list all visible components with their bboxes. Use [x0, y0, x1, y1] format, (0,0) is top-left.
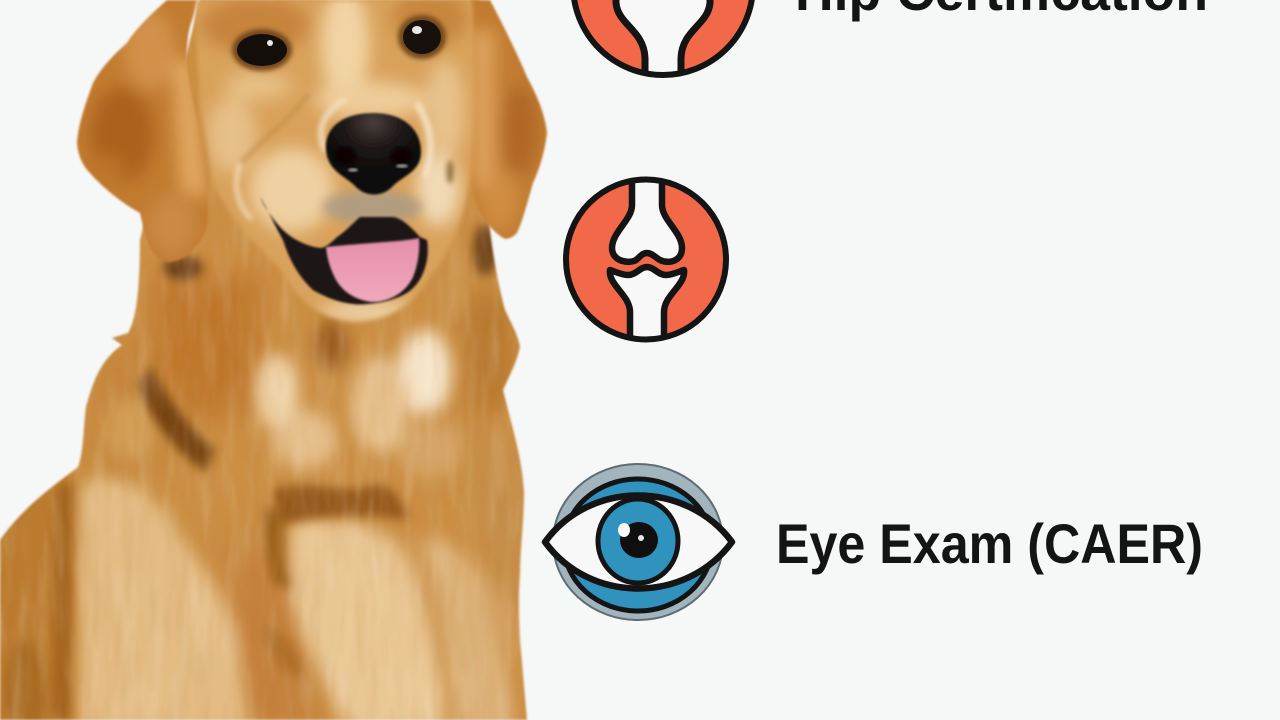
dark fold: [138, 365, 215, 472]
fur texture: [62, 256, 487, 718]
right ear: [470, 0, 549, 240]
icon: elbow or knee joint: [566, 172, 726, 350]
left flank: [0, 470, 72, 720]
left flank shadow: [52, 478, 74, 720]
sclera: [545, 496, 732, 588]
dark under chin: [316, 319, 348, 371]
head and face: [190, 0, 480, 330]
dog body and chest: [0, 0, 540, 720]
icon: hip joint: [571, 0, 755, 78]
upper bone: [612, 172, 682, 262]
tongue: [326, 238, 419, 302]
icon: eye: [545, 464, 732, 620]
shoulder pale: [80, 479, 250, 720]
pupil: [620, 522, 658, 558]
muzzle whiskers: [322, 190, 422, 224]
left ear: [75, 0, 208, 263]
label: eye exam: Eye Exam (CAER): [776, 512, 1203, 575]
nose: [326, 113, 421, 194]
chest cream: [398, 330, 452, 414]
under ear shadow: [163, 256, 203, 280]
right eye: [398, 15, 446, 59]
collar band: [272, 484, 410, 525]
lower bone: [610, 267, 684, 350]
golden retriever photo: [0, 0, 555, 720]
mouth: [260, 197, 428, 304]
iris: [598, 499, 678, 583]
right lock: [418, 539, 515, 720]
left eye: [232, 29, 292, 71]
long lock: [290, 520, 445, 720]
